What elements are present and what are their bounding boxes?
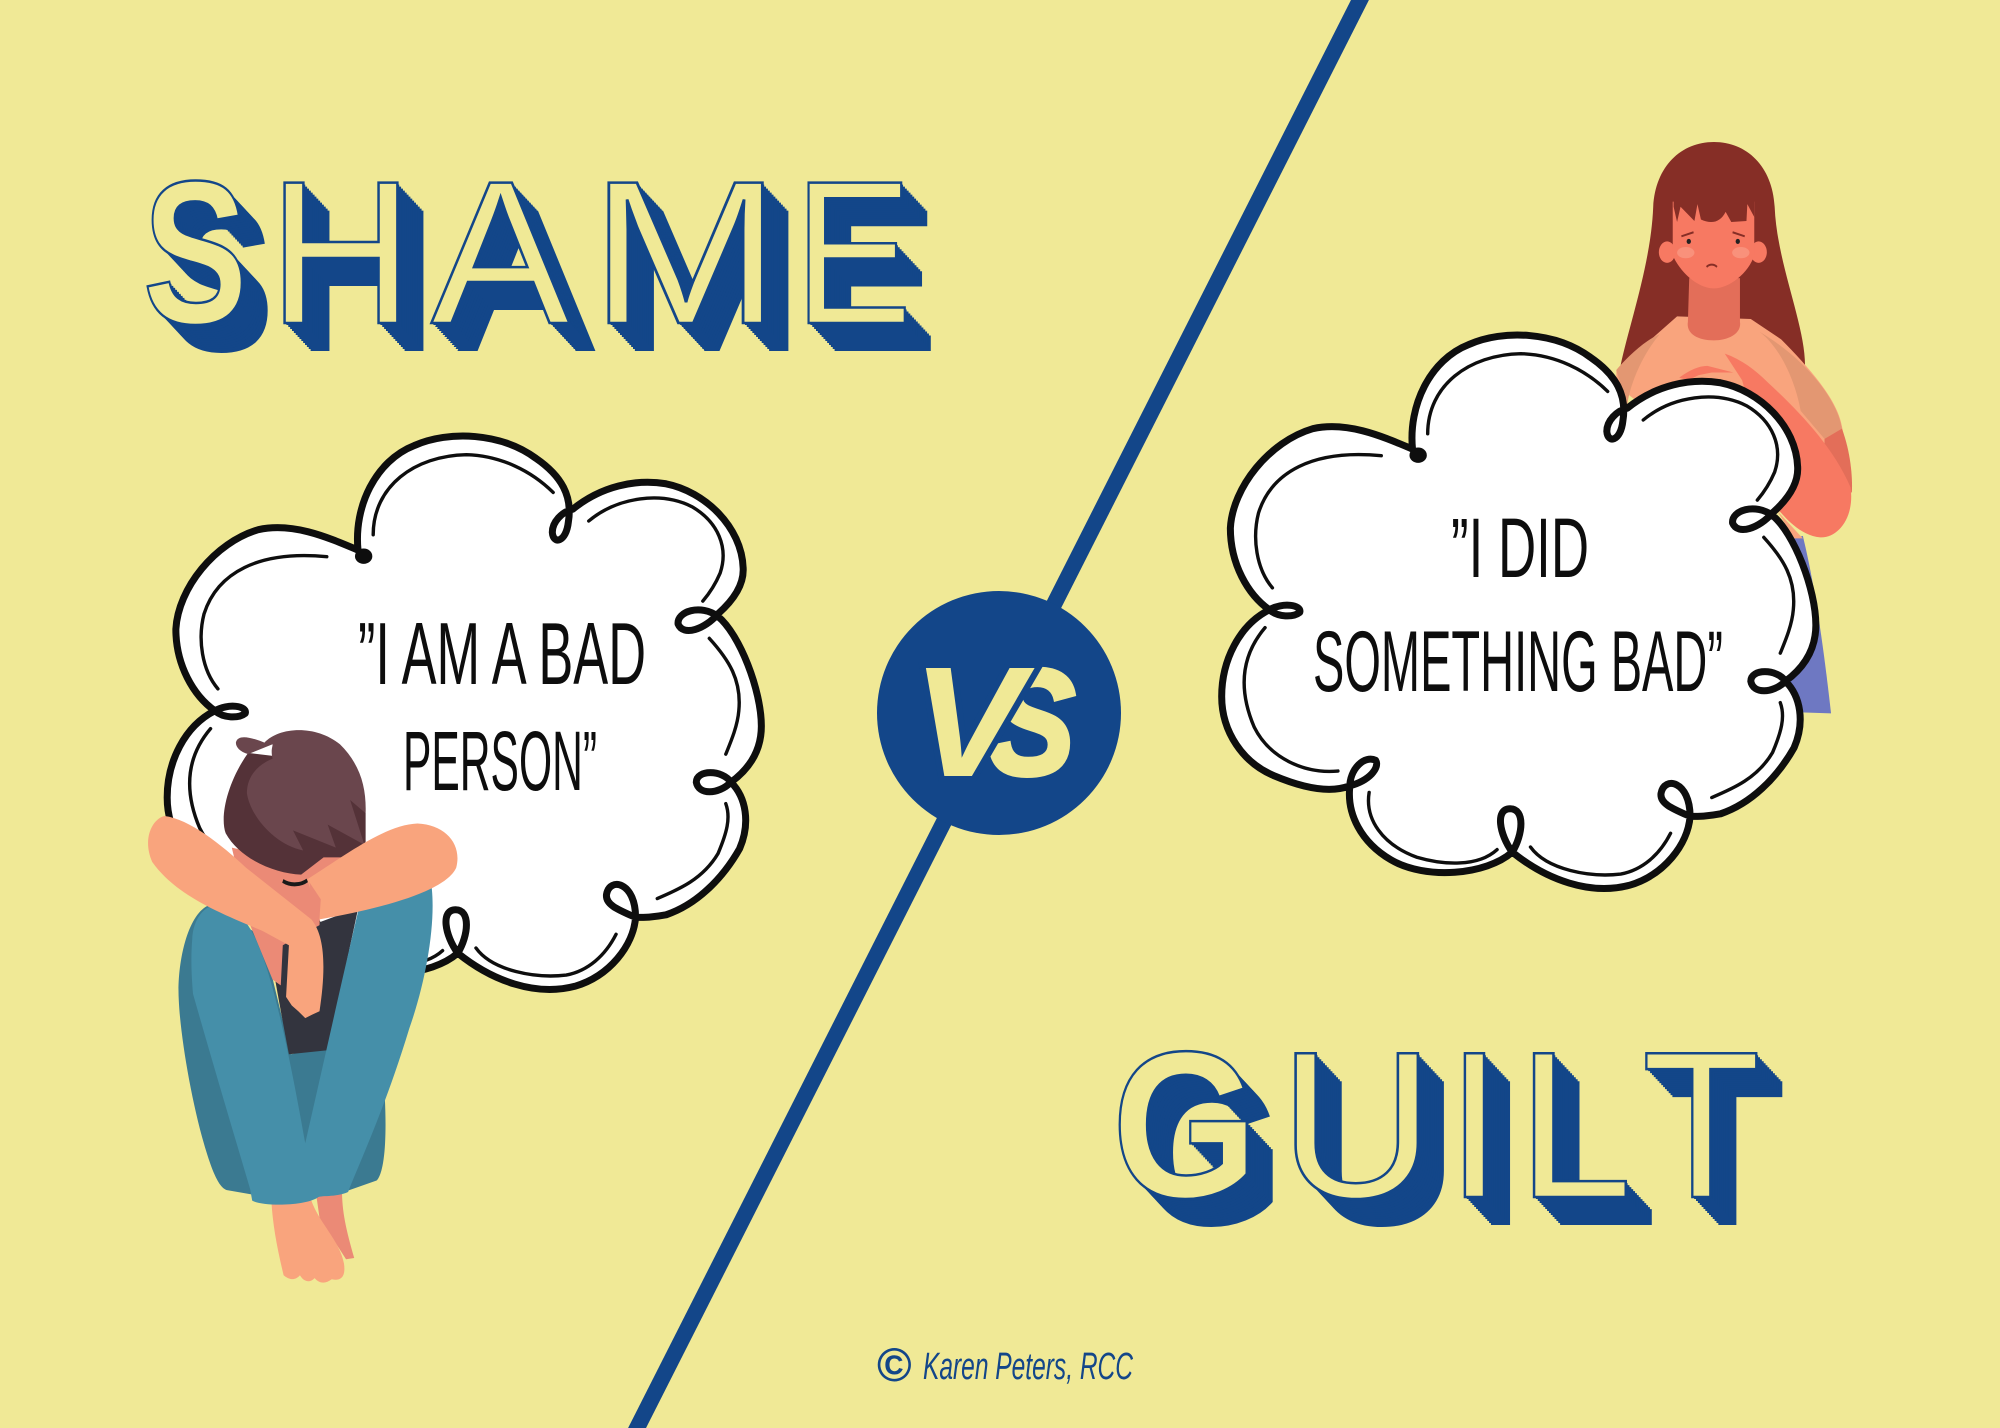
vs badge (877, 591, 1121, 835)
right bubble: I did something bad (1222, 335, 1816, 888)
title: SHAME: H (268, 139, 414, 367)
footer credit (877, 1338, 1133, 1391)
title: GUILT: U (1279, 1009, 1434, 1242)
quote text: I am a bad person (358, 604, 646, 808)
quote text: I did something bad: ”I DID (1451, 501, 1589, 595)
vs badge: S (989, 638, 1075, 806)
footer credit: Karen Peters, RCC (923, 1346, 1133, 1388)
title: SHAME: S (142, 139, 247, 367)
icon: crouching person with head on knees (148, 730, 457, 1283)
title: GUILT: T (1642, 1009, 1761, 1242)
icon: standing woman with hand on chest (1616, 142, 1852, 713)
quote text: I did something bad (1313, 501, 1723, 710)
title: SHAME: A (431, 139, 570, 367)
title: SHAME: E (794, 139, 912, 367)
quote text: I am a bad person: PERSON” (403, 714, 597, 808)
quote text: I am a bad person: ”I AM A BAD (358, 604, 646, 703)
title: GUILT: G (1112, 1009, 1258, 1242)
left figure bubble: I am a bad person (167, 436, 761, 989)
title: GUILT: I (1446, 1009, 1503, 1242)
footer credit: © (877, 1338, 912, 1391)
vs badge: V (912, 635, 1035, 810)
diagonal divider line (633, 0, 1364, 1428)
title: SHAME: M (590, 139, 781, 367)
title: GUILT: L (1517, 1009, 1633, 1242)
